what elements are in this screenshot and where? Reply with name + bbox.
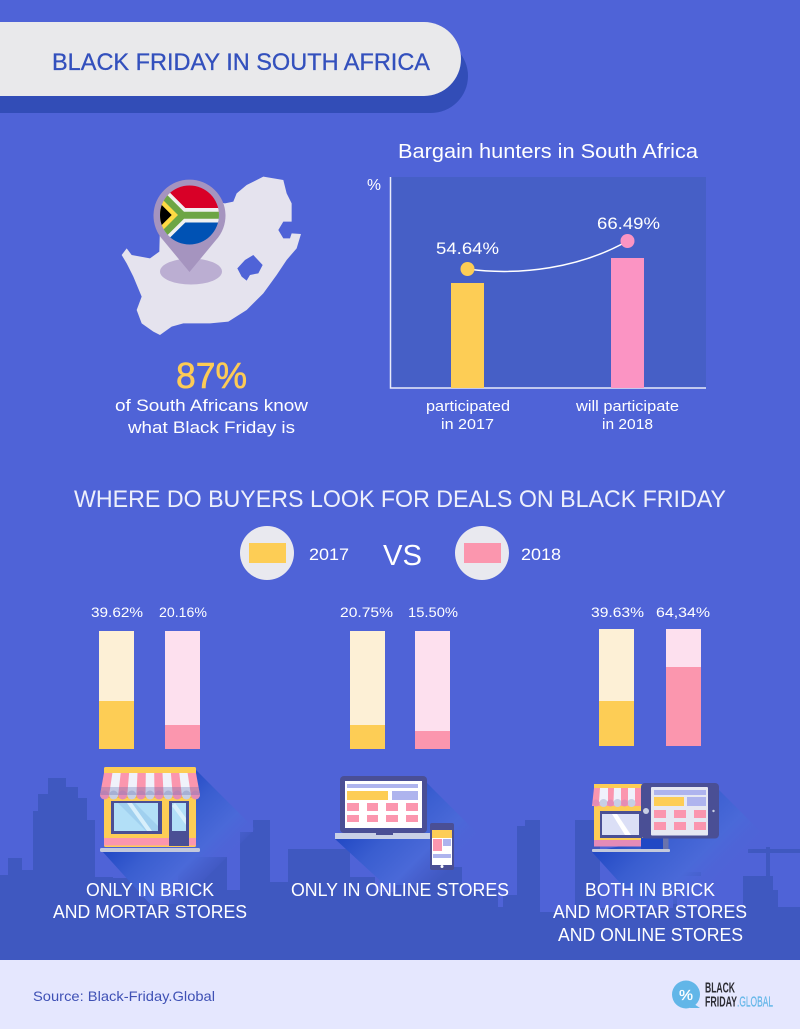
stat: 87% [115, 355, 309, 437]
label: both: AND MORTAR STORES [553, 902, 747, 922]
bars: both [591, 604, 710, 746]
bar 2017 [451, 283, 484, 388]
pin [153, 180, 225, 272]
bar chart: bargain hunters: participated [426, 399, 510, 415]
point 2018 [620, 234, 634, 248]
bar chart: bargain hunters: % [367, 177, 381, 194]
South African flag [160, 186, 219, 244]
bar chart: bargain hunters: 54.64% [436, 239, 499, 258]
bars: only in online stores: 15.50% [408, 604, 458, 620]
label: only in online stores: ONLY IN ONLINE STORES [291, 880, 509, 900]
chart heading: Bargain hunters in South Africa [398, 141, 699, 163]
source: Source: Black-Friday.Global [33, 988, 215, 1004]
logo: FRIDAY [705, 995, 737, 1011]
legend: 2018 [521, 545, 561, 564]
bars: only in brick and mortar: 20.16% [159, 604, 207, 620]
footer bar [0, 960, 800, 1029]
label: only in brick and mortar: ONLY IN BRICK [86, 880, 214, 900]
bar chart: bargain hunters: in 2017 [441, 417, 494, 433]
bars: both: 39.63% [591, 604, 644, 620]
bars: only in brick and mortar: 39.62% [91, 604, 143, 620]
bar 2018 [611, 258, 644, 388]
city skyline [0, 778, 800, 960]
bar chart: bargain hunters [367, 177, 706, 433]
icon: laptop and phone [335, 776, 510, 885]
bars: only in online stores [340, 604, 458, 749]
label: only in brick and mortar [53, 880, 247, 922]
label: both: BOTH IN BRICK [585, 880, 715, 900]
label: both [553, 880, 747, 945]
bar chart: bargain hunters: 66.49% [597, 214, 660, 233]
bars: only in brick and mortar [91, 604, 207, 749]
logo: BLACK [705, 980, 735, 996]
bars: both: 64,34% [656, 604, 710, 620]
pin shadow [160, 258, 222, 284]
title: BLACK FRIDAY IN SOUTH AFRICA [52, 49, 430, 76]
trend line [468, 241, 628, 271]
section heading: WHERE DO BUYERS LOOK FOR DEALS ON BLACK FRIDAY [74, 486, 726, 513]
map of South Africa with pin [122, 173, 301, 335]
bars: only in online stores: 20.75% [340, 604, 393, 620]
legend [240, 526, 561, 580]
icon: percent bubble: % [679, 987, 693, 1004]
label: both: AND ONLINE STORES [558, 925, 743, 945]
legend: VS [383, 540, 422, 572]
logo [672, 980, 773, 1011]
stat: 87%: what Black Friday is [127, 418, 295, 437]
header banner [0, 22, 468, 113]
icon: store and tablet [592, 783, 775, 905]
axis [390, 177, 706, 388]
bar chart: bargain hunters: in 2018 [602, 417, 653, 433]
stat: 87%: 87% [176, 355, 247, 396]
label: only in brick and mortar: AND MORTAR STORES [53, 902, 247, 922]
point 2017 [460, 262, 474, 276]
map shape [122, 177, 301, 335]
logo: .GLOBAL [737, 995, 773, 1011]
legend: 2017 [309, 545, 349, 564]
stat: 87%: of South Africans know [115, 396, 309, 415]
icon: store [100, 767, 255, 904]
bar chart: bargain hunters: will participate [575, 399, 679, 415]
